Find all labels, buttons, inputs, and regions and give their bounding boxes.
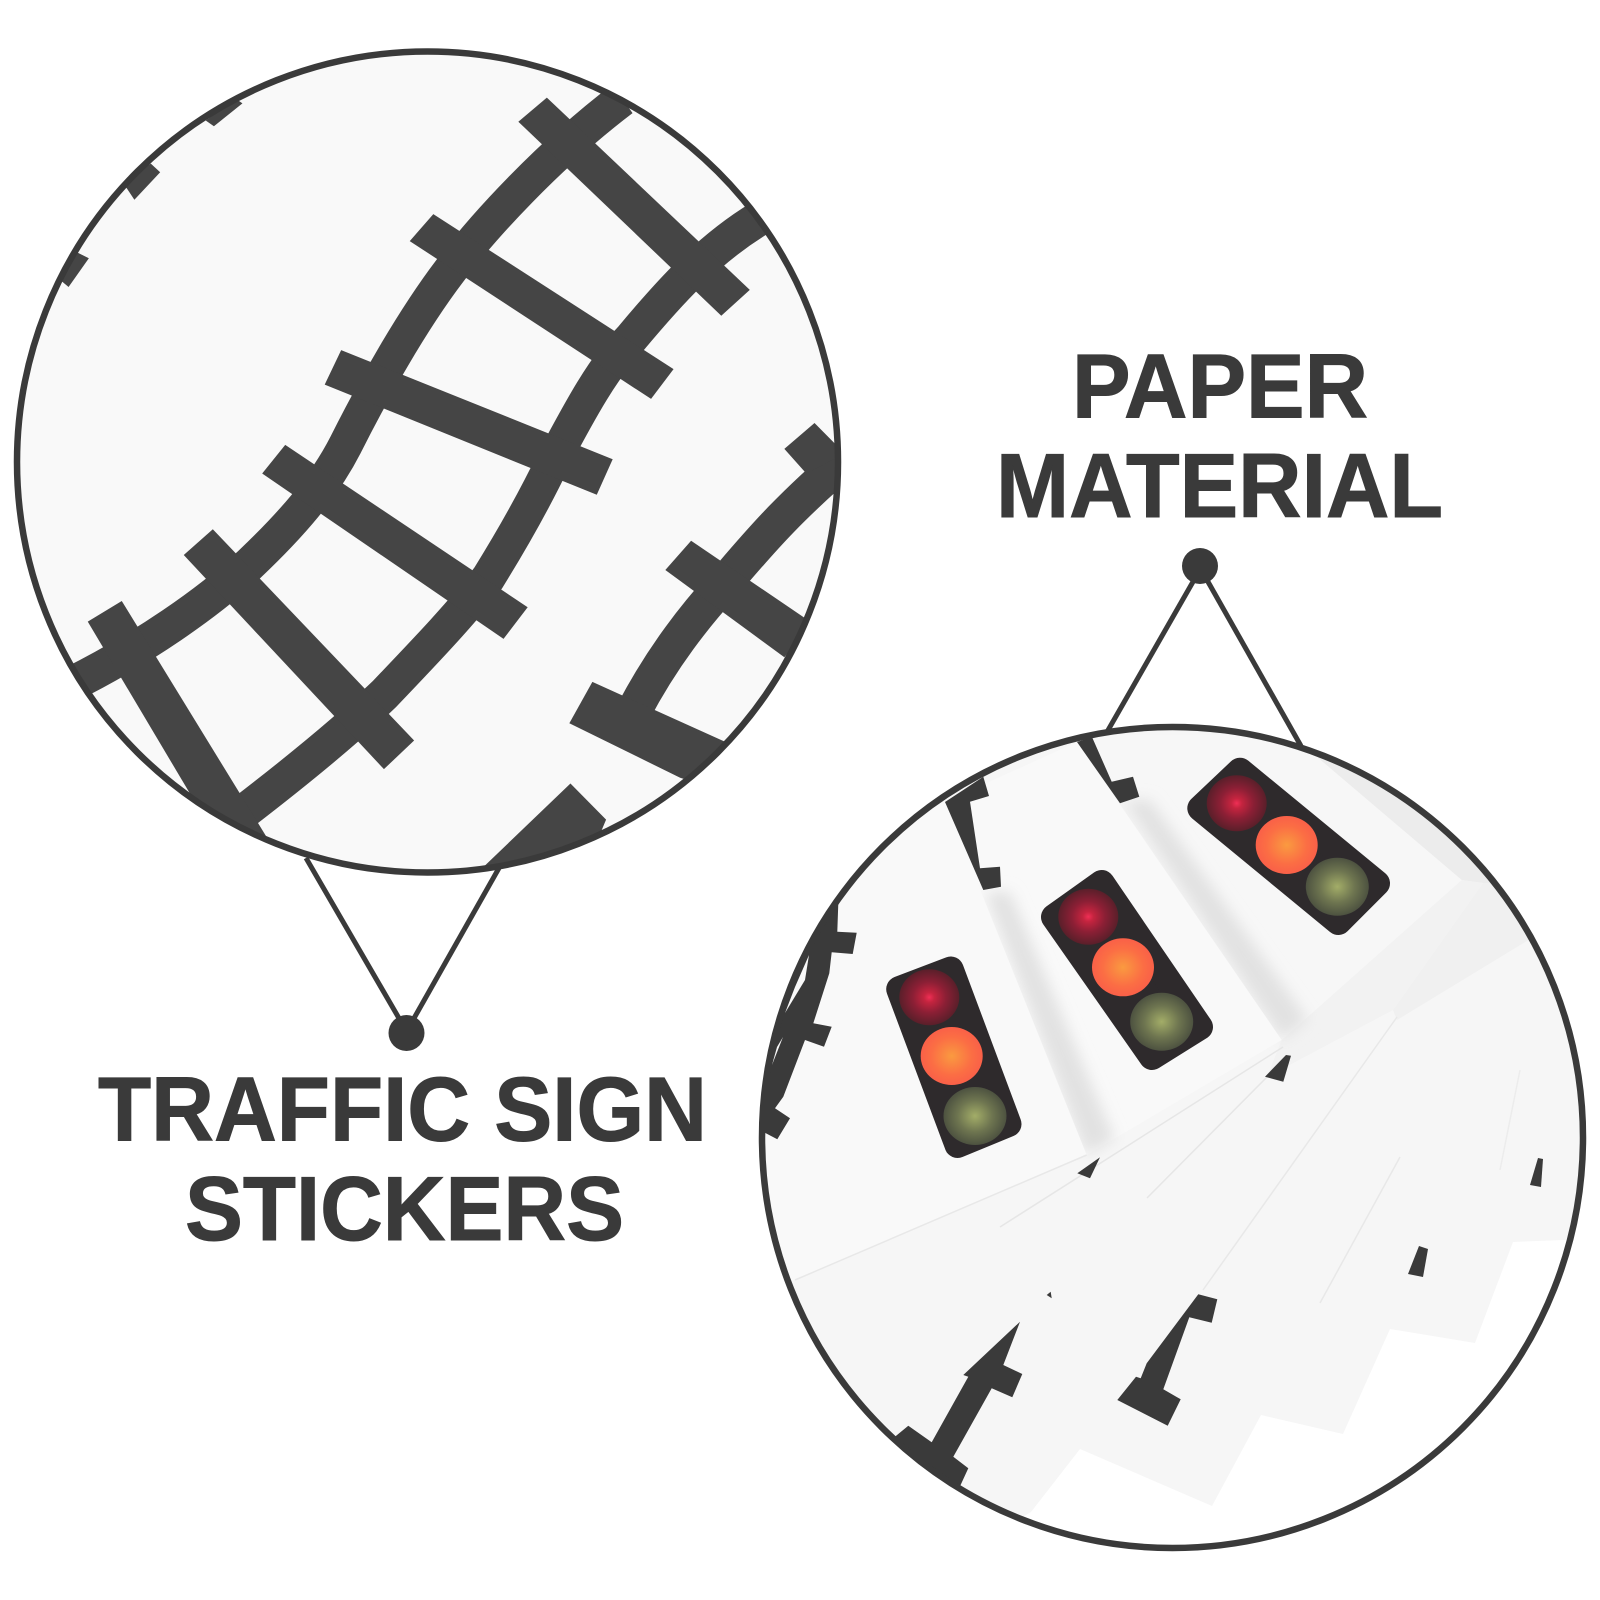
sticker sheet: top right xyxy=(1129,800,1304,1036)
traffic light: left xyxy=(899,969,1008,1145)
top-left track fragments xyxy=(55,99,242,287)
heading: traffic sign stickers: TRAFFIC SIGN xyxy=(98,1060,707,1160)
main track ties xyxy=(88,98,750,850)
right track segment xyxy=(569,423,856,786)
heading: paper material xyxy=(996,336,1443,537)
sticker sheet: middle xyxy=(990,860,1280,1152)
heading: paper material: PAPER xyxy=(1072,336,1368,438)
main track right rail xyxy=(236,218,760,818)
heading: paper material: MATERIAL xyxy=(996,436,1443,537)
panel: paper sheets close-up circle xyxy=(740,700,1600,1560)
callout connector: paper material xyxy=(1107,548,1301,746)
main track left rail xyxy=(71,99,623,684)
callout connector: traffic sign stickers xyxy=(306,858,499,1051)
sticker sheet: left xyxy=(795,904,1086,1280)
track fragments on sheets xyxy=(750,737,1543,1490)
traffic light: right xyxy=(1200,771,1377,922)
bottom track fragment xyxy=(485,784,606,866)
heading: traffic sign stickers: STICKERS xyxy=(185,1159,624,1260)
panel: railway track close-up circle xyxy=(17,52,856,878)
traffic light: middle xyxy=(1054,883,1200,1057)
heading: traffic sign stickers xyxy=(98,1060,707,1260)
fanned paper sheets xyxy=(792,730,1580,1516)
